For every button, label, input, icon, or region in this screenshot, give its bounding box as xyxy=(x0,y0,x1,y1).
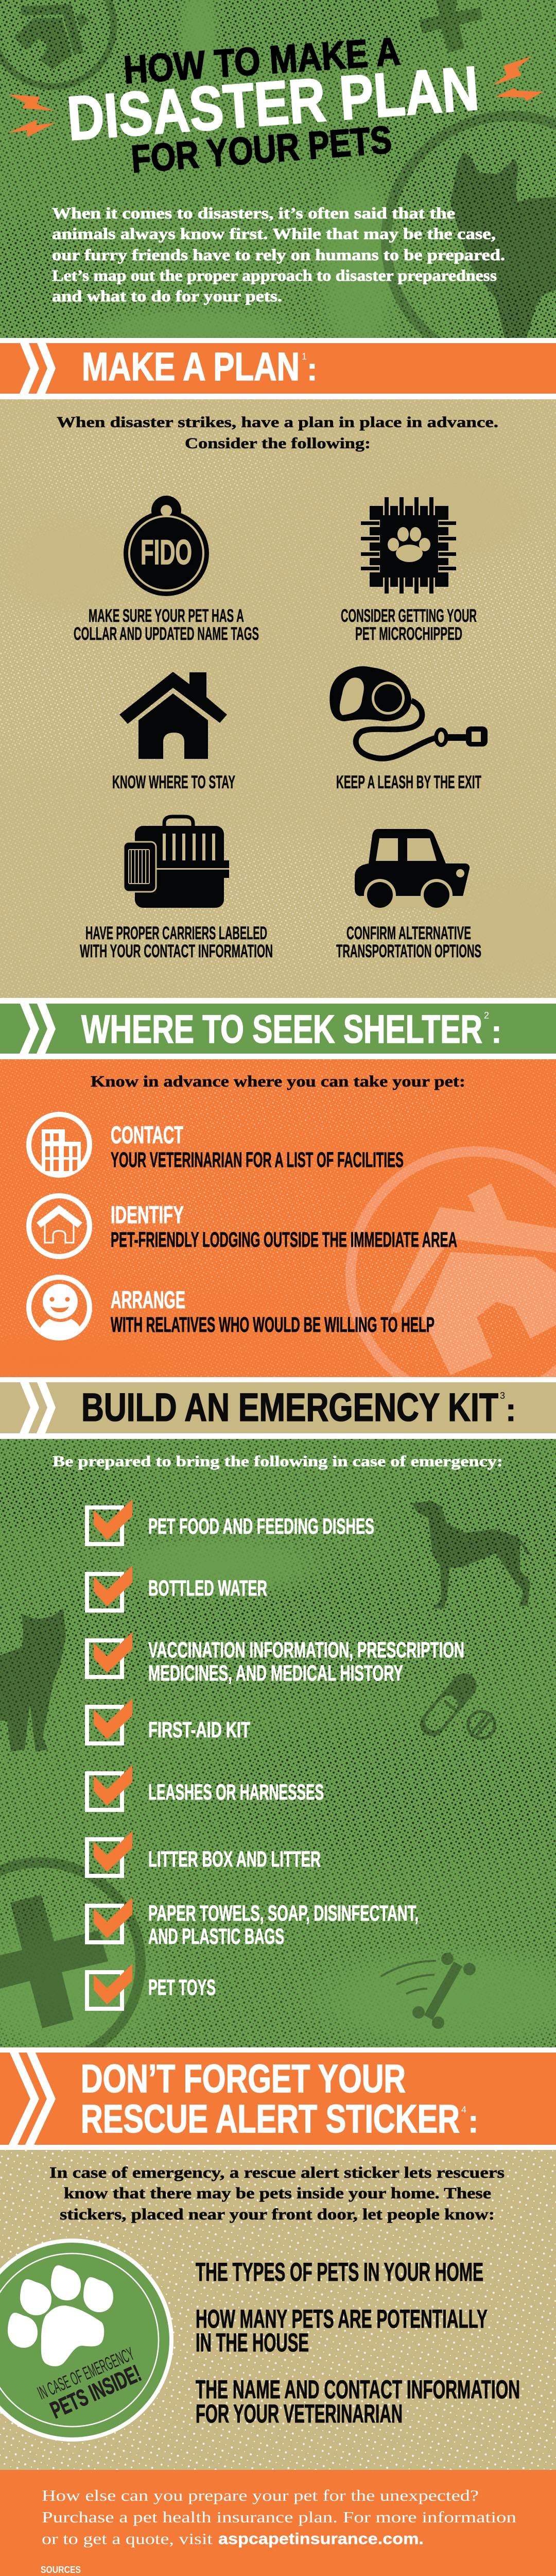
intro text: When it comes to disasters, it’s often said that the xyxy=(52,204,455,222)
label: car xyxy=(336,923,481,961)
call to action: aspcapetinsurance.com. xyxy=(218,2530,424,2548)
icon: building xyxy=(29,1114,90,1180)
icon: microchip xyxy=(361,497,456,594)
background icon: pills xyxy=(432,1686,495,1738)
background icon: house in circle xyxy=(351,1151,556,1401)
step: arrange xyxy=(111,1286,435,1336)
intro text xyxy=(52,204,505,305)
footnote marker 4: 4 xyxy=(461,2105,466,2115)
sticker text: IN CASE OF EMERGENCY xyxy=(34,2343,137,2403)
call to action: How else can you prepare your pet for the unexpected? xyxy=(42,2486,479,2504)
label: name tag: COLLAR AND UPDATED NAME TAGS xyxy=(74,624,259,644)
call to action: or to get a quote, visit xyxy=(42,2530,213,2548)
icon: retractable leash xyxy=(329,666,488,758)
list: what the sticker tells people xyxy=(196,2258,520,2428)
speckle texture xyxy=(0,2150,556,2470)
label: carrier: HAVE PROPER CARRIERS LABELED xyxy=(85,923,267,943)
label: carrier xyxy=(80,923,273,961)
icon: chevrons xyxy=(20,343,56,394)
checklist item: vaccination records xyxy=(87,1632,464,1686)
label: house: KNOW WHERE TO STAY xyxy=(112,772,235,792)
checklist item: food: PET FOOD AND FEEDING DISHES xyxy=(148,1514,374,1539)
list: what the sticker tells people: IN THE HOUSE xyxy=(196,2328,309,2357)
background icon: bone xyxy=(381,1953,476,2029)
icon: chevrons xyxy=(20,1382,56,1433)
intro text: stickers, placed near your front door, let people know: xyxy=(60,2205,495,2223)
icon: house xyxy=(119,672,227,759)
checklist item: leashes: LEASHES OR HARNESSES xyxy=(148,1780,324,1805)
icon: smiling person xyxy=(29,1277,90,1340)
checklist item: water: BOTTLED WATER xyxy=(148,1576,267,1601)
halftone texture xyxy=(0,0,556,338)
heading: rescue alert sticker: DON’T FORGET YOUR xyxy=(81,2057,406,2101)
panel: where to seek shelter xyxy=(0,1059,556,1401)
checklist item: food xyxy=(87,1499,374,1544)
title: DISASTER PLAN xyxy=(65,53,481,154)
intro text: Know in advance where you can take your pet: xyxy=(91,1072,465,1090)
checklist item: vaccination records: MEDICINES, AND MEDICAL HISTORY xyxy=(148,1661,403,1686)
intro text xyxy=(57,414,498,452)
halftone texture xyxy=(0,1439,556,2047)
intro text: and what to do for your pets. xyxy=(52,287,282,305)
intro text: know that there may be pets inside your home. These xyxy=(64,2184,491,2202)
step: contact xyxy=(111,1121,404,1172)
panel: make a plan xyxy=(0,399,556,998)
checklist item: toys: PET TOYS xyxy=(148,1975,216,2000)
label: microchip xyxy=(341,606,477,644)
background icon: dog xyxy=(412,1501,531,1608)
panel: build an emergency kit xyxy=(0,1439,556,2063)
checklist item: cleaning supplies xyxy=(87,1897,419,1949)
icon: paw xyxy=(8,2265,113,2366)
icon: chevrons xyxy=(20,1004,56,1054)
intro text: When disaster strikes, have a plan in place in advance. xyxy=(57,414,498,431)
panel: rescue alert sticker xyxy=(0,2150,556,2470)
intro text: Let’s map out the proper approach to disaster preparedness xyxy=(52,266,497,284)
checklist item: first aid: FIRST-AID KIT xyxy=(148,1718,250,1742)
intro text xyxy=(49,2163,505,2223)
footnote marker 3: 3 xyxy=(500,1391,505,1401)
title: FOR YOUR PETS xyxy=(130,117,393,181)
call to action: Purchase a pet health insurance plan. For more information xyxy=(42,2508,517,2526)
title: HOW TO MAKE A xyxy=(122,29,402,92)
checklist item: cleaning supplies: AND PLASTIC BAGS xyxy=(148,1924,284,1949)
sticker xyxy=(0,2239,173,2442)
footnote marker 2: 2 xyxy=(484,1010,489,1021)
background icon: cat xyxy=(0,1608,66,1752)
checklist item: first aid xyxy=(87,1699,250,1743)
icon: lightning bolts right xyxy=(493,56,543,101)
panel: header xyxy=(0,0,556,365)
panel: footer xyxy=(0,2470,556,2576)
checklist item: water xyxy=(87,1566,267,1611)
icon: pet carrier xyxy=(124,817,229,908)
step: arrange: ARRANGE xyxy=(111,1286,185,1313)
title xyxy=(65,29,481,181)
colon: : xyxy=(468,2104,479,2140)
intro text: animals always know first. While that may be the case, xyxy=(52,225,496,243)
icon: house outline xyxy=(29,1196,90,1257)
label: microchip: PET MICROCHIPPED xyxy=(355,624,462,644)
step: identify xyxy=(111,1201,457,1251)
checklist item: litter: LITTER BOX AND LITTER xyxy=(148,1847,321,1872)
label: name tag xyxy=(74,606,259,644)
background icon: medical cross xyxy=(420,0,482,53)
colon: : xyxy=(307,352,318,387)
footnote marker 1: 1 xyxy=(302,351,307,362)
icon: name tag xyxy=(124,496,209,596)
section banner: rescue alert sticker xyxy=(0,2047,556,2150)
icon: chevrons xyxy=(9,2053,56,2145)
intro text: Be prepared to bring the following in case of emergency: xyxy=(53,1453,503,1470)
section banner: make a plan xyxy=(0,338,556,399)
speckle texture xyxy=(0,399,556,998)
icon: car xyxy=(355,829,470,911)
background icon: house in circle xyxy=(0,0,114,87)
call to action xyxy=(42,2486,517,2548)
checklist item: toys xyxy=(87,1964,216,2009)
icon: lightning bolts left xyxy=(8,94,56,137)
background icon: cross in circle xyxy=(0,1862,141,2063)
label: carrier: WITH YOUR CONTACT INFORMATION xyxy=(80,941,273,961)
step: contact: CONTACT xyxy=(111,1121,183,1148)
label: car: CONFIRM ALTERNATIVE xyxy=(346,923,471,943)
label: name tag: MAKE SURE YOUR PET HAS A xyxy=(89,606,244,626)
list: what the sticker tells people: FOR YOUR VETERINARIAN xyxy=(196,2399,403,2428)
intro text: In case of emergency, a rescue alert sticker lets rescuers xyxy=(49,2163,505,2181)
section banner: where to seek shelter xyxy=(0,998,556,1059)
heading: rescue alert sticker xyxy=(81,2057,460,2141)
checklist item: litter xyxy=(87,1831,321,1876)
sticker text xyxy=(34,2343,145,2424)
intro text: Consider the following: xyxy=(185,435,371,452)
sources: SOURCES xyxy=(41,2565,81,2575)
colon: : xyxy=(491,1014,502,1050)
background icon: dog in circle xyxy=(386,116,556,365)
step: identify: IDENTIFY xyxy=(111,1201,184,1228)
speckle texture xyxy=(0,1059,556,1377)
sticker text: PETS INSIDE! xyxy=(46,2360,145,2424)
colon: : xyxy=(506,1393,516,1428)
section banner: build an emergency kit xyxy=(0,1377,556,1439)
intro text: our furry friends have to rely on humans to be prepared. xyxy=(52,246,505,264)
heading: make a plan: MAKE A PLAN xyxy=(82,345,300,389)
icon: name tag: FIDO xyxy=(141,533,192,572)
checklist item: leashes xyxy=(87,1765,324,1810)
